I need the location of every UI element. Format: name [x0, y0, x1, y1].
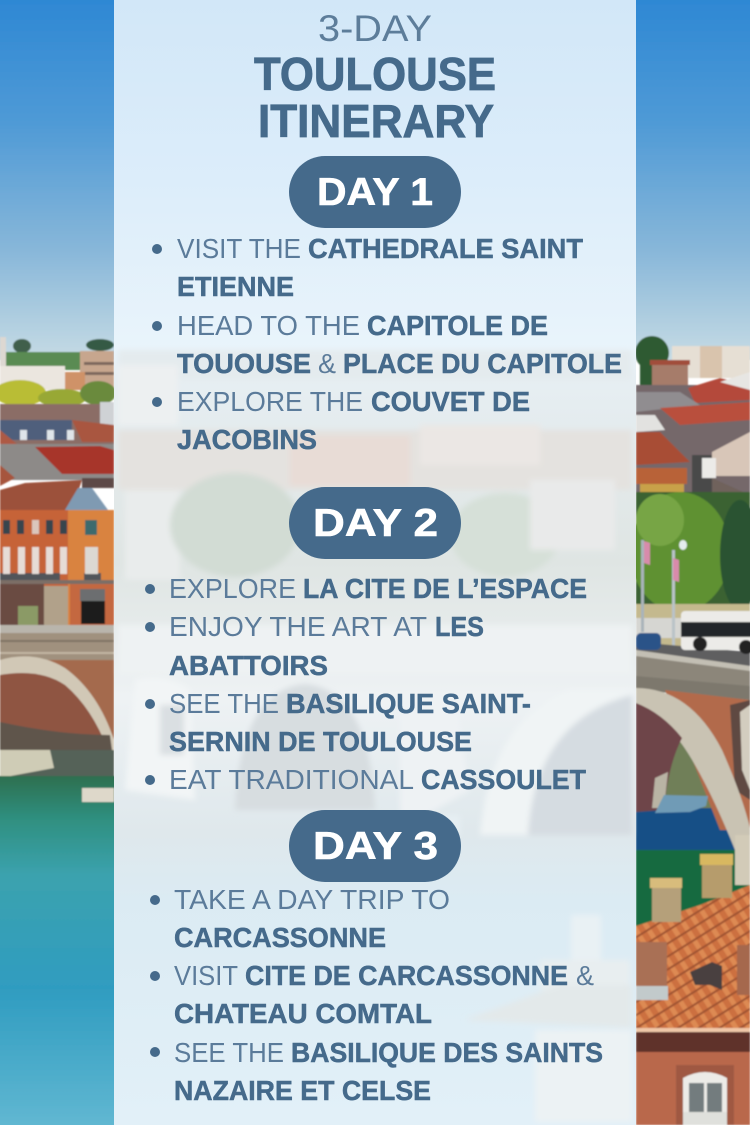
- right rooftops: [636, 372, 750, 493]
- heading: day 2: [289, 487, 461, 559]
- right sky: [632, 0, 750, 360]
- left river: [0, 776, 118, 1125]
- left orange building: [0, 510, 114, 625]
- heading: day 3: DAY 3: [313, 825, 438, 868]
- list: day 1: ETIENNE: [177, 271, 294, 302]
- list: day 3: CARCASSONNE: [174, 922, 386, 953]
- heading: day 1: DAY 1: [317, 171, 433, 214]
- list: day 2: CASSOULET: [421, 764, 586, 795]
- heading: day 1: [289, 156, 461, 228]
- list: day 1: JACOBINS: [177, 424, 317, 455]
- title: TOULOUSE: [254, 48, 496, 100]
- right bridge: [636, 650, 750, 885]
- list: day 2: SEE THE: [169, 688, 279, 719]
- list: day 1: [152, 233, 622, 455]
- list: day 2: [145, 573, 587, 795]
- left bridge: [0, 625, 114, 778]
- right trees and lamp posts: [630, 492, 750, 652]
- list: day 3: CHATEAU COMTAL: [174, 998, 432, 1029]
- title: ITINERARY: [258, 95, 494, 147]
- heading: day 3: [289, 810, 461, 882]
- list: day 3: TAKE A DAY TRIP TO: [174, 884, 450, 915]
- list: day 1: COUVET DE: [371, 386, 530, 417]
- list: day 1: EXPLORE THE: [177, 386, 363, 417]
- list: day 3: NAZAIRE ET CELSE: [174, 1075, 431, 1106]
- list: day 3: SEE THE: [174, 1037, 284, 1068]
- list: day 1: TOUOUSE: [177, 348, 311, 379]
- list: day 1: &: [318, 348, 336, 379]
- background photo, left strip: [0, 0, 118, 1125]
- translucent panel with faded photo: [114, 0, 636, 1125]
- list: day 1: CAPITOLE DE: [367, 310, 548, 341]
- right distant skyline: [635, 336, 750, 391]
- list: day 2: ABATTOIRS: [169, 650, 328, 681]
- list: day 2: LES: [435, 611, 484, 642]
- list: day 3: [150, 884, 603, 1106]
- list: day 1: VISIT THE: [177, 233, 301, 264]
- list: day 2: LA CITE DE L’ESPACE: [303, 573, 587, 604]
- heading: day 2: DAY 2: [313, 502, 438, 545]
- list: day 3: &: [576, 960, 594, 991]
- list: day 2: SERNIN DE TOULOUSE: [169, 726, 472, 757]
- list: day 1: CATHEDRALE SAINT: [308, 233, 583, 264]
- car: [636, 633, 661, 650]
- list: day 2: BASILIQUE SAINT-: [286, 688, 531, 719]
- right water: [636, 741, 750, 927]
- title: [254, 8, 496, 147]
- right road: [636, 644, 750, 667]
- bus: [681, 611, 750, 654]
- background photo, right strip: [630, 0, 750, 1125]
- left pier footing: [82, 788, 114, 802]
- left skyline: [0, 337, 116, 407]
- right foreground roof and chimneys: [636, 854, 750, 1125]
- list: day 1: HEAD TO THE: [177, 310, 360, 341]
- left sky: [0, 0, 116, 360]
- list: day 2: EXPLORE: [169, 573, 296, 604]
- title: 3-DAY: [318, 8, 432, 49]
- list: day 2: ENJOY THE ART AT: [169, 611, 427, 642]
- list: day 3: BASILIQUE DES SAINTS: [291, 1037, 603, 1068]
- list: day 3: CITE DE CARCASSONNE: [245, 960, 568, 991]
- left rooftops: [0, 402, 114, 510]
- list: day 2: EAT TRADITIONAL: [169, 764, 414, 795]
- list: day 1: PLACE DU CAPITOLE: [343, 348, 622, 379]
- list: day 3: VISIT: [174, 960, 238, 991]
